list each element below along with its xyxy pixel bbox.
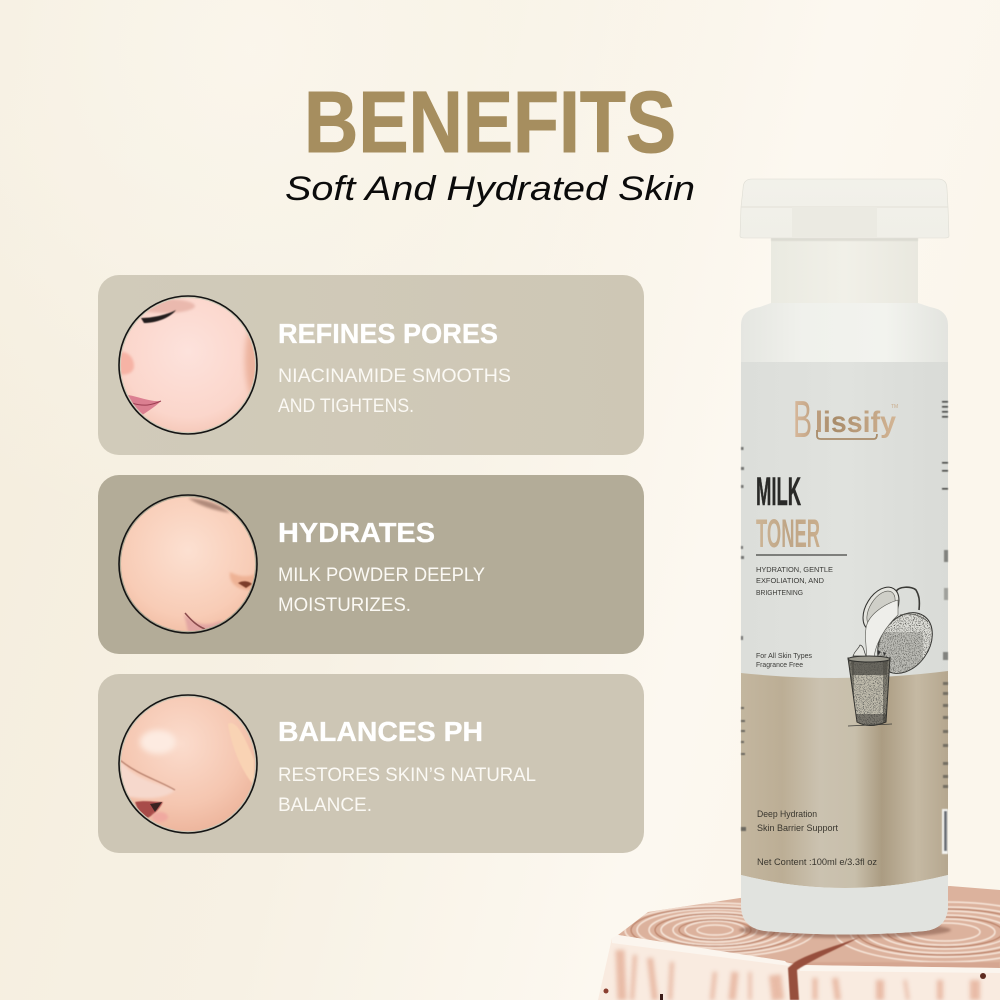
icon: milk pitcher pouring into glass [847,586,933,726]
product claim: BRIGHTENING [756,588,803,597]
brand logo: TM [891,404,898,410]
product: milk toner bottle [739,179,951,938]
net content: Net Content :100ml e/3.3fl oz [757,857,877,867]
brand logo: lissify [815,406,896,439]
description: MILK POWDER DEEPLY [278,565,485,586]
icon: cheek skin close-up 2 [119,495,257,640]
heading: REFINES PORES [278,318,498,349]
panel: balances ph [98,674,644,853]
icon: cheek skin close-up 1 [118,296,263,434]
stump crack [788,937,860,1000]
panel: refines pores [98,275,644,455]
heading: HYDRATES [278,517,435,548]
skin type note: Fragrance Free [756,660,803,669]
subtitle: Soft And Hydrated Skin [285,170,695,208]
side label fine print right [942,401,948,854]
description: AND TIGHTENS. [278,396,414,417]
description: BALANCE. [278,795,372,816]
bottle shadow on stump [739,922,951,938]
description: RESTORES SKIN’S NATURAL [278,765,536,786]
gold label band [741,671,948,888]
bottle neck [771,234,918,304]
bottle cap [740,179,949,238]
brand logo [793,391,898,449]
side label fine print left [741,447,746,831]
brand logo: B [793,391,812,449]
description: NIACINAMIDE SMOOTHS [278,366,511,387]
stump side face [598,938,1000,1000]
stump front rim [612,935,790,966]
feature list: Skin Barrier Support [757,823,838,833]
grey label [741,362,948,682]
skin type note: For All Skin Types [756,651,812,660]
bottle base [741,875,948,934]
icon: nose skin close-up 3 [119,695,257,833]
feature list: Deep Hydration [757,809,817,819]
stump top with growth rings [618,886,1000,968]
title: BENEFITS [304,74,676,171]
product claim: HYDRATION, GENTLE [756,565,833,574]
heading: BALANCES PH [278,716,483,747]
product: milk toner bottle: MILK [756,470,801,514]
description: MOISTURIZES. [278,595,411,616]
product claim: EXFOLIATION, AND [756,576,825,585]
bottle body [741,303,948,934]
wood stump [598,886,1000,1000]
product: milk toner bottle: TONER [756,512,820,556]
panel: hydrates [98,475,644,654]
rule [756,554,847,556]
